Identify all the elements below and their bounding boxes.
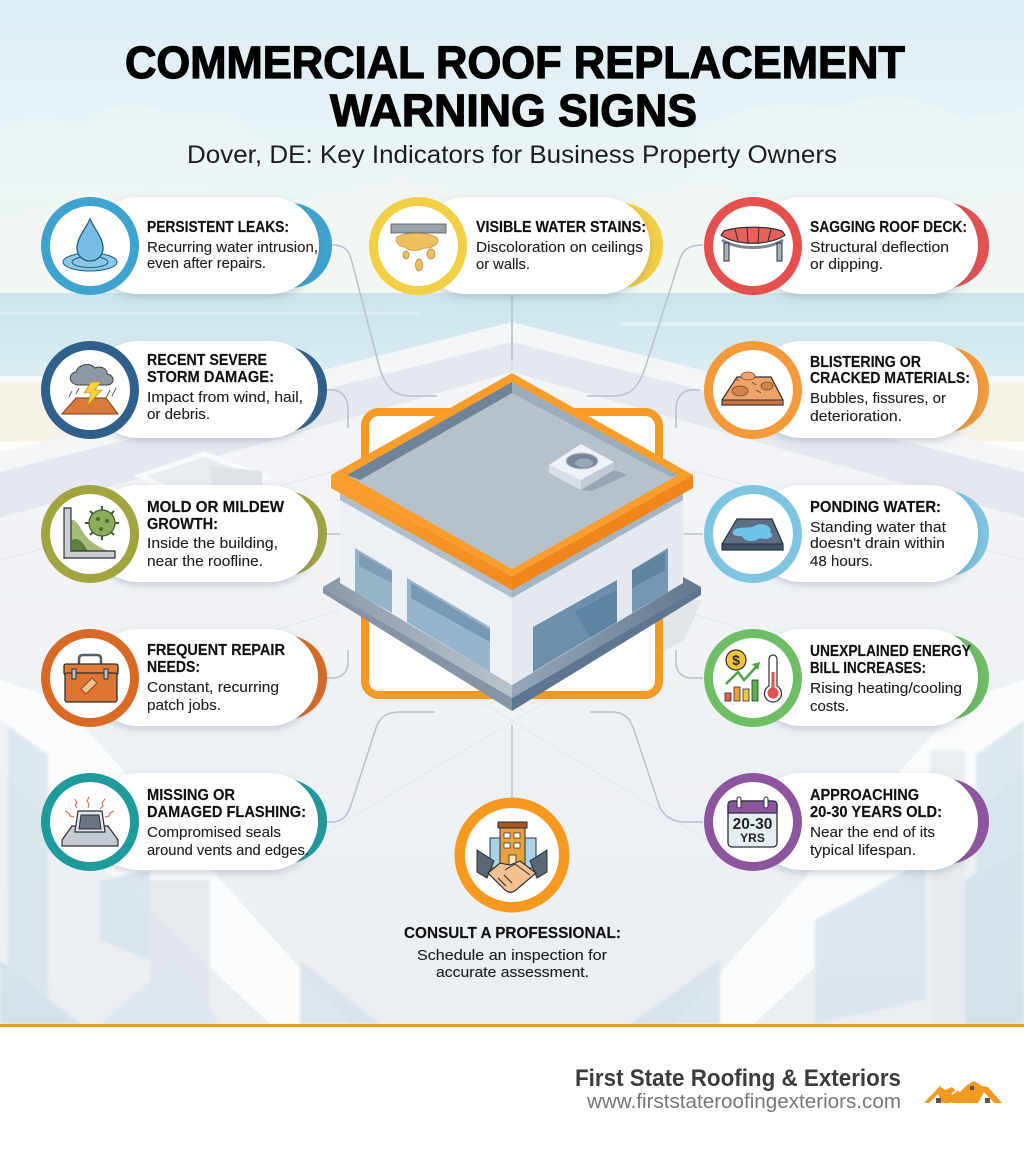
orange roof rim [331,373,693,590]
text: FREQUENT REPAIR [147,642,285,659]
icon: calendar: 20-30 [733,816,772,833]
text [147,499,284,570]
base slab [323,577,701,711]
text [476,219,646,273]
card: approaching 20-30 years old [704,773,989,871]
text: deterioration. [810,408,902,425]
card: frequent repair needs [41,629,327,727]
card: blistering or cracked materials [704,341,989,439]
text: MOLD OR MILDEW [147,499,284,516]
text: patch jobs. [147,697,221,714]
text: or dipping. [810,256,883,273]
text: DAMAGED FLASHING: [147,804,306,821]
icon: blistered panel [722,372,783,405]
icon: storm [62,365,118,414]
central building illustration [323,373,702,711]
text: Compromised seals [147,824,281,841]
icon: energy costs [725,650,781,702]
text: Recurring water intrusion, [147,239,318,256]
title [125,37,905,136]
icon: flashing [62,797,118,846]
footer band [0,1024,1024,1154]
text: Schedule an inspection for [417,947,607,964]
card: mold or mildew growth [41,485,327,583]
text: RECENT SEVERE [147,352,267,369]
white diagonal beams [0,680,350,1024]
card: persistent leaks [41,197,332,295]
text: STORM DAMAGE: [147,369,274,386]
text [147,787,309,859]
windows [355,548,668,672]
text: Constant, recurring [147,679,279,696]
text: PONDING WATER: [810,499,941,516]
text: CONSULT A PROFESSIONAL: [404,925,621,942]
text [810,354,970,425]
text: BLISTERING OR [810,354,921,371]
icon: toolbox [64,655,118,702]
text [147,352,303,423]
text: Discoloration on ceilings [476,239,643,256]
text: VISIBLE WATER STAINS: [476,219,646,236]
walls [340,490,683,685]
icon: water drop [63,219,117,271]
text: Bubbles, fissures, or [810,390,946,407]
text: CRACKED MATERIALS: [810,370,970,387]
roof vent [549,444,627,491]
text: UNEXPLAINED ENERGY [810,643,972,660]
card: visible water stains [369,197,663,295]
text: Inside the building, [147,535,278,552]
text: BILL INCREASES: [810,660,926,677]
text: even after repairs. [147,255,266,272]
text: APPROACHING [810,787,919,804]
logo: orange rooftops [924,1081,1002,1103]
icon: handshake and building [477,822,547,892]
text: around vents and edges. [147,842,309,859]
orange frame [365,412,659,695]
card: recent severe storm damage [41,341,327,439]
text: accurate assessment. [436,964,589,981]
title: COMMERCIAL ROOF REPLACEMENT [125,37,905,88]
icon: calendar: YRS [740,831,765,845]
text: Standing water that [810,519,947,536]
text: near the roofline. [147,553,263,570]
card: unexplained energy bill increases [704,629,989,727]
website: www.firststateroofingexteriors.com [586,1091,901,1113]
text [810,787,942,859]
text: Rising heating/cooling [810,680,962,697]
text: GROWTH: [147,516,218,533]
text [810,499,947,570]
icon: water stain [391,224,446,271]
text: doesn't drain within [810,535,945,552]
company name: First State Roofing & Exteriors [575,1065,901,1092]
text [810,643,972,715]
text: Impact from wind, hail, [147,389,303,406]
text: SAGGING ROOF DECK: [810,219,967,236]
text: Structural deflection [810,239,949,256]
text [810,219,967,273]
connector lines [327,245,703,822]
text: 48 hours. [810,553,873,570]
text: or walls. [476,256,530,273]
card: ponding water [704,485,989,583]
subtitle: Dover, DE: Key Indicators for Business Property Owners [187,141,837,169]
icon: ponding water [722,519,783,550]
icon: mold [64,506,119,558]
text: costs. [810,698,849,715]
icon: sagging deck [721,227,785,261]
roof surface [347,382,678,569]
text: PERSISTENT LEAKS: [147,219,289,236]
card: sagging roof deck [704,197,989,295]
text [147,642,285,714]
call to action: consult a professional [404,798,621,981]
text: Near the end of its [810,824,935,841]
card: missing or damaged flashing [41,773,327,871]
text: 20-30 YEARS OLD: [810,804,942,821]
text: MISSING OR [147,787,235,804]
text [404,925,621,981]
text: NEEDS: [147,659,200,676]
title: WARNING SIGNS [330,85,697,136]
icon: calendar [728,797,777,847]
text: typical lifespan. [810,842,916,859]
text [147,219,318,272]
icon: energy costs: $ [732,652,740,668]
text: or debris. [147,406,210,423]
